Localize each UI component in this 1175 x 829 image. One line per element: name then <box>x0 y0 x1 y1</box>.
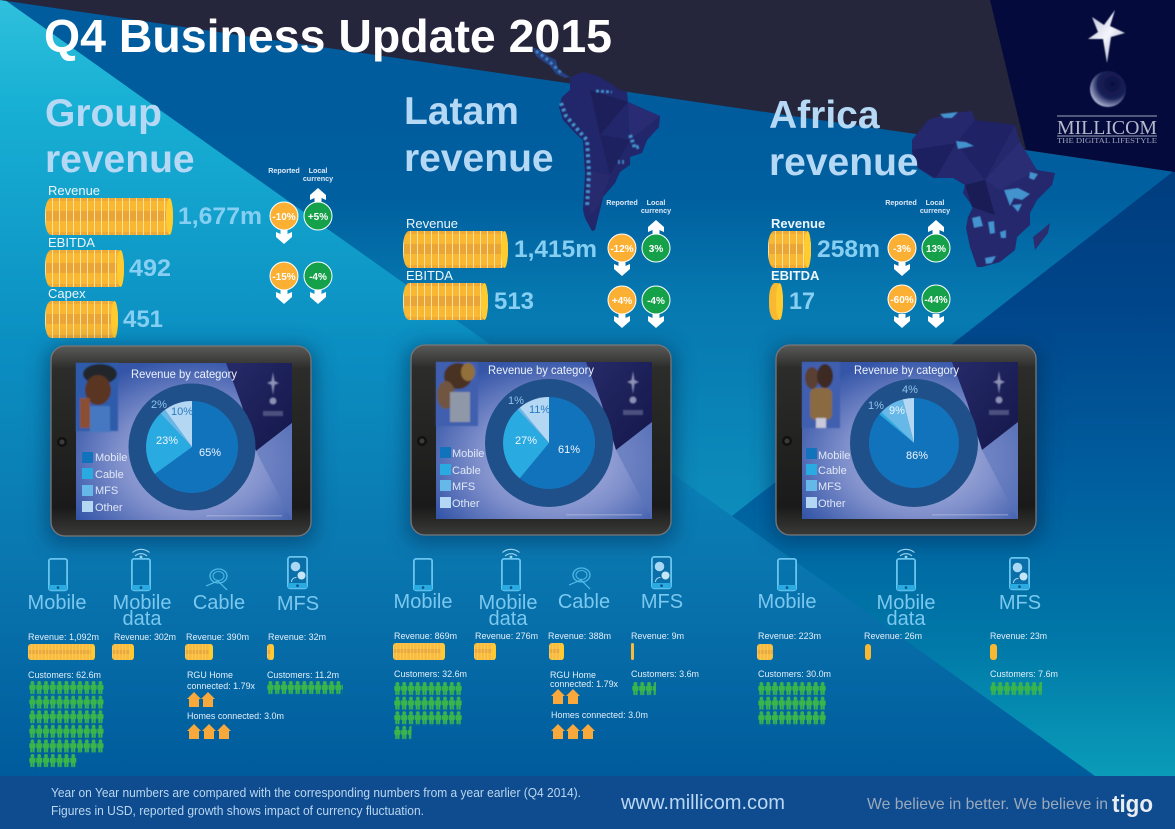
map: Africa <box>912 111 1055 267</box>
tablet: group revenue by category: 23% <box>156 435 178 447</box>
heading: africa revenue: Africa <box>769 94 880 137</box>
column: africa MFS: Revenue: 23m <box>990 631 1047 642</box>
panel: group revenue <box>28 92 343 769</box>
column: latam cable: Cable <box>558 591 610 613</box>
growth badges: latam: currency <box>641 206 671 215</box>
column: latam MFS <box>631 557 699 696</box>
bar: group capex <box>45 286 163 338</box>
column: latam MFS: Revenue: 9m <box>631 631 684 642</box>
column: africa mobile data: Mobile <box>877 592 935 614</box>
logo: Millicom: THE DIGITAL LIFESTYLE <box>1057 137 1157 145</box>
bar: latam revenue: 1,415m <box>514 236 597 263</box>
tablet: africa revenue by category: Revenue by category <box>854 363 959 377</box>
column: africa MFS: MFS <box>999 592 1041 614</box>
tablet: latam revenue by category: Cable <box>452 465 481 477</box>
bar: africa revenue <box>768 216 880 268</box>
tablet: group revenue by category: Cable <box>95 469 124 481</box>
column: group mobile: Mobile <box>28 592 86 614</box>
bar: latam EBITDA: EBITDA <box>406 268 453 283</box>
column: group cable: RGU Home <box>187 670 233 681</box>
column: group MFS: Customers: 11.2m <box>267 670 339 681</box>
footnote <box>51 786 581 818</box>
column: latam MFS: Customers: 3.6m <box>631 669 699 680</box>
tablet: latam revenue by category: 1% <box>508 395 524 407</box>
column: group cable: connected: 1.79x <box>187 681 255 692</box>
growth badges: group: currency <box>303 174 333 183</box>
bar: group revenue <box>45 183 262 235</box>
bar: africa EBITDA <box>769 268 820 320</box>
tablet: latam revenue by category: Mobile <box>452 448 484 460</box>
growth badges: latam: Reported <box>606 198 638 207</box>
bar: africa EBITDA: EBITDA <box>771 268 820 283</box>
column: africa mobile: Revenue: 223m <box>758 631 821 642</box>
growth badges: africa: -44% <box>924 295 948 306</box>
tablet: africa revenue by category: 86% <box>906 450 928 462</box>
tablet: africa revenue by category <box>771 345 1043 543</box>
bar: africa EBITDA: 17 <box>789 288 815 315</box>
column: africa mobile <box>757 559 831 726</box>
tablet: group revenue by category: MFS <box>95 485 118 497</box>
column: latam mobile: Mobile <box>394 591 452 613</box>
bar: latam revenue: Revenue <box>406 216 458 231</box>
tablet: africa revenue by category: 1% <box>868 400 884 412</box>
growth badges: africa: Local <box>926 198 944 207</box>
growth badges: latam: Local <box>647 198 665 207</box>
tablet: group revenue by category: Revenue by category <box>131 367 237 381</box>
column: latam mobile: Revenue: 869m <box>394 631 457 642</box>
title: Q4 Business Update 2015 <box>44 10 612 62</box>
panel: africa revenue <box>757 94 1058 726</box>
tablet: latam revenue by category <box>406 345 676 543</box>
growth badges: group: -15% <box>272 272 296 283</box>
column: africa mobile: Customers: 30.0m <box>758 669 831 680</box>
bar: latam EBITDA: 513 <box>494 288 534 315</box>
tablet: africa revenue by category: Mobile <box>818 450 850 462</box>
column: latam mobile data: data <box>489 608 528 630</box>
tablet: latam revenue by category: 27% <box>515 435 537 447</box>
tablet: group revenue by category: 65% <box>199 447 221 459</box>
heading: latam revenue: Latam <box>404 90 519 133</box>
column: latam mobile data: Mobile <box>479 592 537 614</box>
tablet: latam revenue by category: Revenue by category <box>488 363 594 377</box>
growth badges: africa: currency <box>920 206 950 215</box>
column: group mobile: Revenue: 1,092m <box>28 632 99 643</box>
footer <box>0 776 1175 829</box>
bar: africa revenue: 258m <box>817 236 880 263</box>
tagline: tigo <box>1112 791 1153 818</box>
column: africa mobile: Mobile <box>758 591 816 613</box>
column: group mobile data: data <box>123 608 162 630</box>
growth badges: latam: 3% <box>649 244 663 255</box>
column: latam cable: connected: 1.79x <box>550 679 618 690</box>
bar: group EBITDA: EBITDA <box>48 235 95 250</box>
column: group mobile <box>28 559 104 769</box>
column: africa mobile data: Revenue: 26m <box>864 631 922 642</box>
bar: latam EBITDA <box>403 268 534 320</box>
bar: group capex: 451 <box>123 306 163 333</box>
column: latam mobile data <box>474 549 538 660</box>
column: group MFS: MFS <box>277 593 319 615</box>
tablet: africa revenue by category: 4% <box>902 384 918 396</box>
column: group mobile data: Mobile <box>113 592 171 614</box>
logo: Millicom: MILLICOM <box>1057 117 1157 139</box>
bar: group revenue: Revenue <box>48 183 100 198</box>
bar: latam revenue <box>403 216 597 268</box>
footnote: Year on Year numbers are compared with the corresponding numbers from a year earlier (Q4 2014). <box>51 786 581 800</box>
growth badges: africa <box>885 198 950 328</box>
tablet: latam revenue by category: 11% <box>529 404 550 416</box>
growth badges: group: -4% <box>309 272 327 283</box>
website: www.millicom.com <box>620 792 785 814</box>
tagline <box>867 791 1153 818</box>
tablet: africa revenue by category: Cable <box>818 465 847 477</box>
map: South America <box>532 47 660 231</box>
tablet: africa revenue by category: MFS <box>818 481 841 493</box>
column: latam MFS: MFS <box>641 591 683 613</box>
column: group cable <box>185 569 284 739</box>
tablet: latam revenue by category: Other <box>452 498 480 510</box>
column: latam cable: Revenue: 388m <box>548 631 611 642</box>
growth badges: latam: -4% <box>647 296 665 307</box>
column: group cable: Homes connected: 3.0m <box>187 711 284 722</box>
heading: latam revenue: revenue <box>404 137 554 180</box>
tablet: africa revenue by category: 9% <box>889 405 905 417</box>
column: group mobile data: Revenue: 302m <box>114 632 176 643</box>
tablet: latam revenue by category: 61% <box>558 444 580 456</box>
growth badges: latam: -12% <box>610 244 634 255</box>
column: latam mobile data: Revenue: 276m <box>475 631 538 642</box>
column: latam cable: RGU Home <box>550 670 596 681</box>
column: africa mobile data: data <box>887 608 926 630</box>
column: africa MFS <box>990 558 1058 696</box>
bar: group revenue: 1,677m <box>178 203 262 230</box>
column: group mobile: Customers: 62.6m <box>28 670 101 681</box>
growth badges: group <box>268 166 333 304</box>
growth badges: group: Reported <box>268 166 300 175</box>
growth badges: latam <box>606 198 671 328</box>
bar: group capex: Capex <box>48 286 86 301</box>
growth badges: group: -10% <box>272 212 296 223</box>
column: latam mobile <box>393 559 467 740</box>
column: latam mobile: Customers: 32.6m <box>394 669 467 680</box>
column: latam cable: Homes connected: 3.0m <box>551 710 648 721</box>
heading: africa revenue <box>769 94 919 184</box>
growth badges: latam: +4% <box>612 296 632 307</box>
column: africa MFS: Customers: 7.6m <box>990 669 1058 680</box>
tablet: group revenue by category <box>46 346 316 544</box>
logo: Millicom <box>1057 10 1157 145</box>
tablet: group revenue by category: Other <box>95 502 123 514</box>
tablet: latam revenue by category: MFS <box>452 481 475 493</box>
growth badges: africa: 13% <box>926 244 946 255</box>
panel: latam revenue <box>393 90 699 740</box>
bar: group EBITDA: 492 <box>129 255 171 282</box>
column: group MFS <box>267 557 343 695</box>
tablet: group revenue by category: Mobile <box>95 452 127 464</box>
tablet: africa revenue by category: Other <box>818 498 846 510</box>
bar: group EBITDA <box>45 235 171 287</box>
bar: africa revenue: Revenue <box>771 216 825 231</box>
growth badges: africa: Reported <box>885 198 917 207</box>
heading: africa revenue: revenue <box>769 141 919 184</box>
column: latam cable <box>548 568 648 739</box>
tablet: group revenue by category: 2% <box>151 399 167 411</box>
column: group cable: Revenue: 390m <box>186 632 249 643</box>
footnote: Figures in USD, reported growth shows impact of currency fluctuation. <box>51 804 424 818</box>
growth badges: group: +5% <box>308 212 328 223</box>
heading: group revenue: Group <box>45 92 162 135</box>
column: group MFS: Revenue: 32m <box>268 632 326 643</box>
column: group mobile data <box>112 549 176 660</box>
tablet: group revenue by category: 10% <box>171 406 193 418</box>
column: africa mobile data <box>864 549 935 660</box>
heading: group revenue: revenue <box>45 138 195 181</box>
growth badges: group: Local <box>309 166 327 175</box>
heading: group revenue <box>45 92 195 181</box>
growth badges: africa: -60% <box>890 295 914 306</box>
tagline: We believe in better. We believe in <box>867 796 1108 813</box>
heading: latam revenue <box>404 90 554 180</box>
growth badges: africa: -3% <box>893 244 911 255</box>
column: group cable: Cable <box>193 592 245 614</box>
